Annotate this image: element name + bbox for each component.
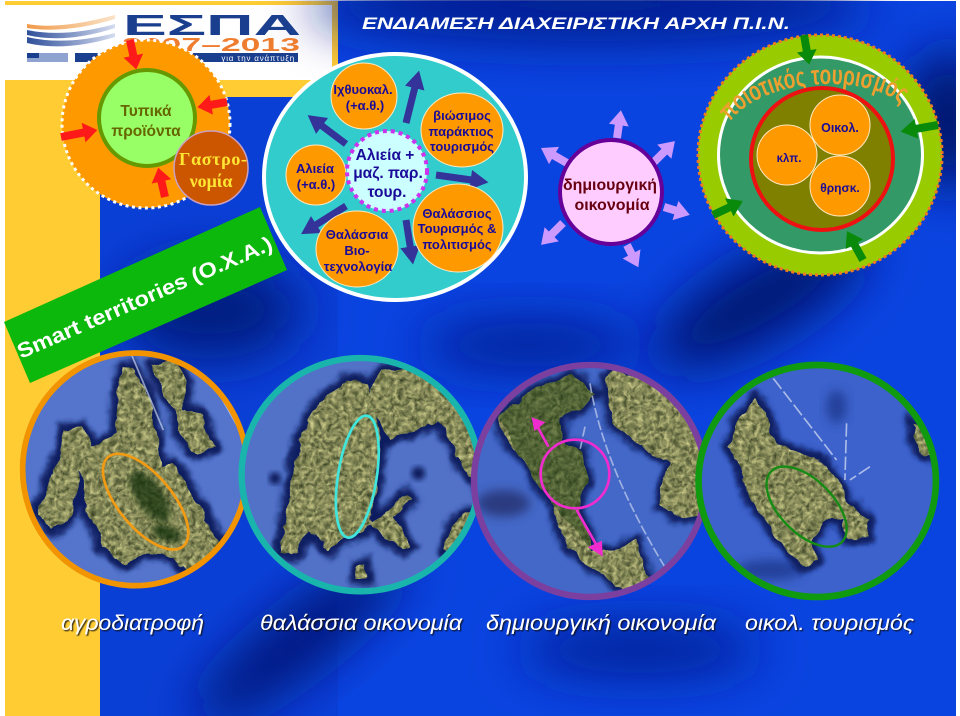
node: center fisheries	[347, 131, 427, 211]
node: κλπ	[757, 125, 817, 185]
logo: ΕΣΠΑ 2007-2013	[27, 10, 301, 63]
node: Αλιεία: Αλιεία	[296, 161, 334, 176]
node: Θαλάσσιος: Θαλάσσιος	[422, 206, 492, 221]
arrow: red left	[59, 120, 99, 147]
node: θρησκ	[810, 156, 870, 216]
panel: creative economy: δημιουργική	[563, 177, 657, 194]
node: Ιχθυοκαλ: (+α.θ.)	[346, 98, 384, 113]
arrows: lilac	[534, 109, 693, 272]
arrow: red bottom	[149, 166, 175, 199]
node: Θαλάσσια: Θαλάσσια	[326, 227, 388, 242]
arrows: navy	[296, 68, 490, 266]
panel: creative economy: οικονομία	[574, 197, 650, 214]
gastronomy circle	[174, 131, 248, 205]
arrow: red top	[120, 38, 146, 71]
node: Ιχθυοκαλ: Ιχθυοκαλ.	[333, 82, 393, 97]
node: κλπ: κλπ.	[777, 153, 801, 165]
gastronomy circle: Γαστρο-	[179, 149, 247, 169]
node: center fisheries: τουρ.	[368, 184, 406, 201]
arrow: red right	[196, 92, 229, 117]
node: βιώσιμος: τουρισμός	[430, 139, 494, 154]
panel: fisheries circle	[264, 54, 526, 300]
node: Οικολ	[810, 95, 870, 155]
panel: typical products circle: Τυπικά	[120, 103, 172, 120]
panel: smart territories banner: Smart territories (Ο.Χ.Α.)	[14, 232, 276, 364]
node: Θαλάσσια: Βιο-	[344, 243, 370, 258]
panel: map marine economy	[238, 354, 478, 594]
panel: map creative economy	[470, 360, 713, 603]
logo: ΕΣΠΑ 2007-2013: ΕΣΠΑ	[123, 10, 301, 42]
node: Θαλάσσια: τεχνολογία	[324, 259, 392, 274]
node: Θαλάσσια	[316, 211, 398, 287]
node: Θαλάσσιος	[413, 184, 503, 272]
node: βιώσιμος: βιώσιμος	[433, 108, 491, 123]
node: Οικολ: Οικολ.	[821, 121, 859, 135]
panel: smart territories banner	[4, 207, 287, 383]
node: θρησκ: θρησκ.	[820, 181, 860, 195]
logo: ΕΣΠΑ 2007-2013: για την ανάπτυξη	[221, 54, 295, 63]
arrows: green	[709, 33, 940, 265]
pink focus ellipse and arrows	[533, 419, 609, 554]
caption: agri-food: αγροδιατροφή	[61, 612, 204, 635]
panel: creative economy	[534, 109, 693, 272]
panel: map agri-food	[20, 350, 246, 588]
node: Αλιεία	[286, 145, 346, 205]
caption: eco tourism: οικολ. τουρισμός	[745, 612, 915, 635]
panel: typical products circle: προϊόντα	[111, 123, 181, 140]
node: Θαλάσσιος: Τουρισμός &	[418, 221, 496, 236]
node: center fisheries: μαζ. παρ.	[353, 165, 423, 182]
node: Ιχθυοκαλ	[331, 63, 397, 129]
node: βιώσιμος	[421, 93, 503, 167]
gastronomy circle: νομία	[189, 171, 232, 191]
node: βιώσιμος: παράκτιος	[429, 124, 494, 139]
panel: quality tourism	[696, 34, 944, 276]
node: Αλιεία: (+α.θ.)	[297, 177, 335, 192]
arched heading: ποιοτικός τουρισμός	[720, 68, 908, 120]
panel: map eco tourism	[690, 357, 947, 607]
caption: marine economy: θαλάσσια οικονομία	[260, 612, 463, 635]
caption: creative economy: δημιουργική οικονομία	[486, 612, 717, 635]
title: ΕΝΔΙΑΜΕΣΗ ΔΙΑΧΕΙΡΙΣΤΙΚΗ ΑΡΧΗ Π.Ι.Ν.	[362, 14, 790, 33]
panel: typical products circle	[59, 38, 248, 208]
node: center fisheries: Αλιεία +	[356, 147, 414, 164]
logo: ΕΣΠΑ 2007-2013: 2007–2013	[122, 35, 300, 55]
node: Θαλάσσιος: πολιτισμός	[422, 237, 492, 252]
